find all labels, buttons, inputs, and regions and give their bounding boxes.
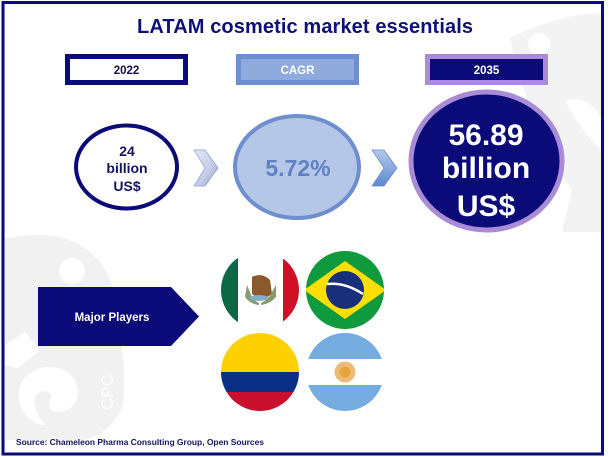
label: 2022: 2022 xyxy=(114,65,139,77)
label: 2035: 2035 xyxy=(474,65,500,77)
circle: 56.89 billion US$: US$ xyxy=(457,190,515,223)
circle: CAGR 5.72% xyxy=(235,116,359,218)
circle: 24 billion US$: US$ xyxy=(113,178,141,194)
source note: Source: Chameleon Pharma Consulting Group, Open Sources xyxy=(16,437,264,447)
circle: 56.89 billion US$: 56.89 xyxy=(448,119,524,152)
label: CAGR: CAGR xyxy=(281,65,315,77)
watermark: left chameleon xyxy=(5,235,124,440)
label: 2035 xyxy=(428,56,546,82)
flag: Argentina xyxy=(306,333,384,412)
circle: 24 billion US$: 24 xyxy=(119,143,135,159)
arrow: chevron 2 xyxy=(372,150,397,186)
circle: 56.89 billion US$: billion xyxy=(442,152,530,185)
label: CAGR xyxy=(238,56,356,82)
circle: 56.89 billion US$ xyxy=(411,92,562,230)
watermark: left chameleon: CPC xyxy=(98,374,117,410)
title: LATAM cosmetic market essentials xyxy=(137,16,473,38)
circle: 24 billion US$: billion xyxy=(106,160,148,176)
arrow: Major Players xyxy=(38,287,199,346)
circle: CAGR 5.72%: 5.72% xyxy=(265,155,331,181)
arrow: Major Players: Major Players xyxy=(75,312,149,324)
arrow: chevron 1 xyxy=(194,150,218,186)
watermark: right chameleon xyxy=(510,13,601,232)
flag: Colombia xyxy=(221,333,299,412)
label: 2022 xyxy=(68,56,186,82)
circle: 24 billion US$ xyxy=(76,126,177,208)
flag: Brazil xyxy=(304,251,386,329)
flag: Mexico xyxy=(221,258,299,322)
